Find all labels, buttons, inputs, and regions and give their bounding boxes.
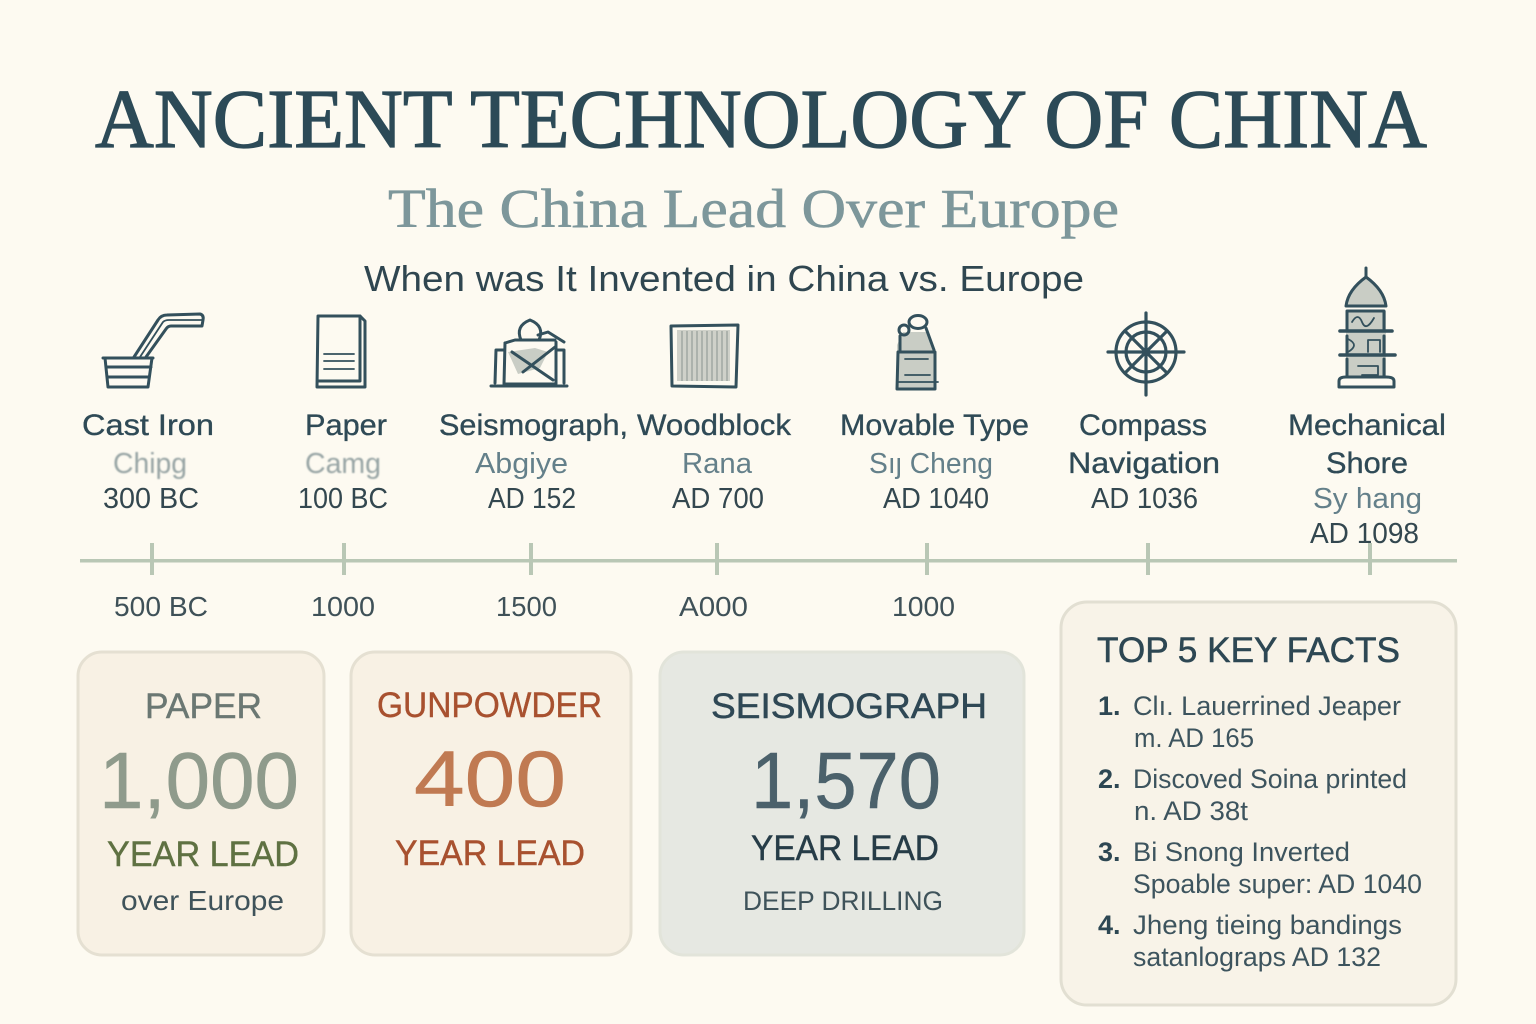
fact 4: Jheng tieing bandings <box>1133 910 1402 940</box>
invention: cast iron <box>82 314 214 515</box>
fact 2 <box>1098 764 1407 826</box>
date: mechanical: AD 1098 <box>1310 518 1419 550</box>
panel: gunpowder lead <box>351 652 631 955</box>
inventor: seismograph: Abgiye <box>475 448 568 480</box>
axis label: 500 BC: 500 BC <box>114 591 208 622</box>
panel: top 5 key facts <box>1061 602 1456 1005</box>
inventor: mechanical: Sy hang <box>1313 483 1422 515</box>
label: paper: Paper <box>305 409 387 442</box>
invention: movable type <box>840 316 1029 515</box>
axis label: 1500: 1500 <box>496 591 557 622</box>
fact 1: 1. <box>1098 691 1121 721</box>
label: navigation: Navigation <box>1068 447 1220 480</box>
invention: paper <box>298 316 388 515</box>
date: woodblock: AD 700 <box>672 483 764 515</box>
label: seismograph: Seismograph, <box>439 409 628 442</box>
panel: seismograph lead <box>660 652 1024 955</box>
inventor: movable type: Sıȷ Cheng <box>869 448 993 480</box>
year lead: seismograph: YEAR LEAD <box>751 829 939 868</box>
card heading: gunpowder: GUNPOWDER <box>377 686 602 725</box>
panel heading: TOP 5 KEY FACTS <box>1097 631 1400 670</box>
fact 3: Spoable super: AD 1040 <box>1133 869 1422 899</box>
subtitle: The China Lead Over Europe <box>388 178 1119 239</box>
icon: seismograph <box>491 320 567 386</box>
icon: woodblock <box>671 325 738 387</box>
card heading: seismograph: SEISMOGRAPH <box>711 687 987 726</box>
label: movable type: Movable Type <box>840 409 1029 442</box>
icon: paper book <box>317 316 365 387</box>
label: woodblock: Woodblock <box>637 409 792 442</box>
fact 3: 3. <box>1098 837 1121 867</box>
section heading: When was It Invented in China vs. Europe <box>364 258 1084 299</box>
icon: tower <box>1339 268 1395 387</box>
date: paper: 100 BC <box>298 483 388 515</box>
card heading: paper: PAPER <box>145 687 262 726</box>
fact 2: 2. <box>1098 764 1121 794</box>
axis label: 1000: 1000 <box>311 591 375 622</box>
label: compass: Compass <box>1079 409 1207 442</box>
big number: 400: 400 <box>414 734 566 823</box>
invention: seismograph <box>439 320 628 515</box>
fact 1: m. AD 165 <box>1134 723 1254 753</box>
axis label: A000: A000 <box>679 591 748 622</box>
label: shore: Shore <box>1326 447 1408 480</box>
timeline <box>80 543 1457 622</box>
inventor: paper: Camg <box>305 448 381 480</box>
fact 4 <box>1098 910 1402 972</box>
big number: 1,570: 1,570 <box>751 736 941 825</box>
fact 2: n. AD 38t <box>1134 796 1249 826</box>
big number: 1,000: 1,000 <box>99 736 299 825</box>
label: cast iron: Cast Iron <box>82 409 214 442</box>
invention: compass <box>1068 313 1220 515</box>
axis label: 1000 second: 1000 <box>892 591 955 622</box>
date: cast iron: 300 BC <box>103 483 199 515</box>
date: seismograph: AD 152 <box>488 483 576 515</box>
date: compass: AD 1036 <box>1091 483 1198 515</box>
date: movable type: AD 1040 <box>883 483 989 515</box>
fact 1: Clı. Lauerrined Jeaper <box>1133 691 1401 721</box>
invention: mechanical clock tower <box>1288 268 1446 550</box>
fact 3 <box>1098 837 1422 899</box>
inventor: cast iron: Chipg <box>113 448 187 480</box>
panel: paper lead <box>78 652 324 955</box>
year lead: paper: YEAR LEAD <box>107 835 299 874</box>
fact 3: Bi Snong Inverted <box>1133 837 1350 867</box>
fact 1 <box>1098 691 1401 753</box>
label: mechanical: Mechanical <box>1288 409 1446 442</box>
icon: cast iron ladle <box>103 314 203 387</box>
fact 4: 4. <box>1098 910 1121 940</box>
inventor: woodblock: Rana <box>682 448 753 480</box>
fact 4: satanlograps AD 132 <box>1133 942 1381 972</box>
icon: movable type <box>897 316 938 389</box>
year lead: gunpowder: YEAR LEAD <box>395 834 585 873</box>
note: deep drilling: DEEP DRILLING <box>743 886 943 916</box>
note: over europe: over Europe <box>121 885 284 916</box>
fact 2: Discoved Soina printed <box>1133 764 1407 794</box>
invention: woodblock <box>637 325 792 515</box>
title: ANCIENT TECHNOLOGY OF CHINA <box>95 73 1427 166</box>
icon: compass <box>1108 313 1184 395</box>
